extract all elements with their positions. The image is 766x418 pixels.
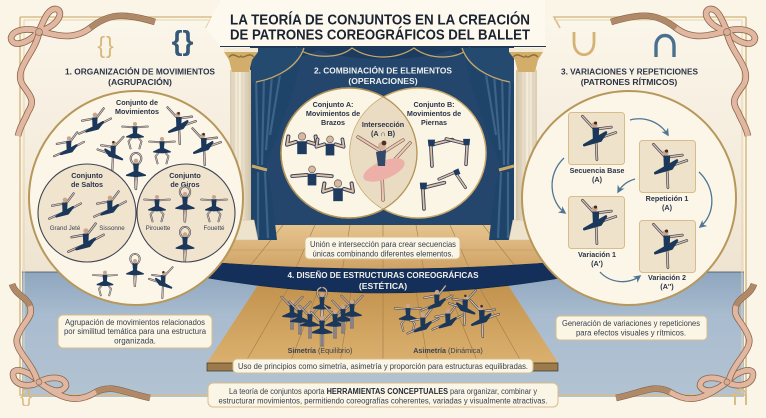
subset: turns: Conjunto [169,171,201,180]
label: asymmetry: Asimetría (Dinámica) [413,346,483,355]
label: set B: Movimientos de [407,109,461,118]
label: set B: Conjunto B: [413,100,455,109]
subset: jumps: Grand Jeté [50,225,81,232]
caption: union and intersection: Unión e intersección para crear secuencias [310,240,456,249]
caption: union and intersection [305,237,460,259]
lower stage platform [207,285,558,371]
icon: intersection [656,36,674,57]
label: set A: Conjunto A: [313,100,353,109]
card: variation 1: Variación 1 [578,250,616,259]
heading: section 4: (ESTÉTICA) [359,281,407,291]
card: base sequence [568,112,624,184]
icon: gold braces: {} [97,32,115,58]
card: repetition [640,140,696,212]
conclusion box [208,383,558,407]
label: set A [306,100,360,127]
title banner: DE PATRONES COREOGRÁFICOS DEL BALLET [230,26,531,44]
heading: section 3 [561,66,698,87]
title banner [206,0,546,46]
caption: variations: para efectos visuales y rítmicos. [576,328,686,338]
arm movement dancers [287,133,353,201]
left curtain [252,48,304,240]
caption: grouping [58,315,212,348]
label: set of movements [115,98,159,116]
caption: union and intersection: únicas combinando diferentes elementos. [312,250,454,258]
asymmetric formation [395,286,499,355]
conclusion box: estructurar movimientos, permitiendo coreografías coherentes, variadas y visualmente atractivas. [218,396,548,406]
caption: grouping: Agrupación de movimientos relacionados [65,318,205,327]
card: base sequence: (A) [592,175,603,184]
icon: union [574,32,594,55]
label: symmetry: Simetría (Equilibrio) [288,346,352,355]
card: variation 2: (A'') [660,282,674,291]
right ribbon bottom [616,284,754,399]
label: intersection: (A ∩ B) [371,129,396,138]
card: repetition: (A) [662,203,673,212]
heading: section 1: (AGRUPACIÓN) [108,76,172,87]
left ribbon bottom [12,284,150,399]
right ribbon top [611,9,755,136]
card: variation 1 [568,196,624,268]
icon: small intersection [735,389,746,405]
movement dancers [54,108,221,189]
upper stage floor [214,225,552,272]
icon: navy braces: {} [172,25,193,56]
subset: jumps [38,164,136,262]
left ribbon top [11,9,155,136]
subset: jumps: Sissonne [99,225,125,232]
card: variation 2: Variación 2 [648,273,686,282]
label: set A: Brazos [321,118,345,127]
card: variation 1: (A') [591,259,603,268]
label: intersection: Intersección [362,120,404,129]
label: set B [407,100,461,127]
navy banner band [196,262,572,293]
icon: small gold braces: {} [20,386,32,406]
label: set A: Movimientos de [306,109,360,118]
heading: section 4 [288,270,479,291]
subset: turns: de Giros [170,180,200,189]
panel: venn diagram [281,88,486,218]
title banner: LA TEORÍA DE CONJUNTOS EN LA CREACIÓN [230,10,530,28]
subset: turns: Fouetté [204,225,225,232]
heading: section 3: (PATRONES RÍTMICOS) [581,77,677,87]
label: set of movements: Conjunto de [116,98,158,107]
conclusion box: La teoría de conjuntos aporta HERRAMIENTAS CONCEPTUALES para organizar, combinar y [229,387,537,396]
left column [223,48,258,240]
label: set B: Piernas [421,118,447,127]
card: base sequence: Secuencia Base [570,166,624,175]
right column [509,48,544,240]
caption: grouping: organizada. [114,336,156,346]
subset: turns [137,164,235,262]
subset: jumps: Conjunto [71,171,103,180]
panel: variation circle [522,91,736,305]
heading: section 2: 2. COMBINACIÓN DE ELEMENTOS [314,64,452,76]
symmetric formation [281,288,363,355]
subset: turns: Pirouette [146,225,171,232]
heading: section 2 [314,64,452,86]
caption: variations: Generación de variaciones y repeticiones [562,319,700,328]
heading: section 1 [65,66,215,87]
label: set of movements: Movimientos [115,107,159,116]
card: variation 2 [640,220,696,291]
card: repetition: Repetición 1 [646,194,688,203]
caption: principles: Uso de principios como simetría, asimetría y proporción para estructuras equilibradas. [238,362,528,371]
arrows between sequences [552,119,712,282]
bottom dancers [93,254,173,298]
heading: section 3: 3. VARIACIONES Y REPETICIONES [561,66,698,76]
caption: variations [556,316,707,340]
stage backdrop [250,47,514,227]
right curtain [462,48,514,240]
heading: section 1: 1. ORGANIZACIÓN DE MOVIMIENTOS [65,66,215,76]
heading: section 4: 4. DISEÑO DE ESTRUCTURAS COREOGRÁFICAS [288,270,479,280]
caption: principles [233,359,533,373]
leg movement dancers [420,139,470,209]
panel: grouping circle [29,91,243,305]
heading: section 2: (OPERACIONES) [348,76,418,86]
main dancer with pink tutu [358,137,410,200]
subset: jumps: de Saltos [71,180,103,189]
caption: grouping: por similitud temática para una estructura [64,327,207,336]
label: intersection [362,120,404,138]
